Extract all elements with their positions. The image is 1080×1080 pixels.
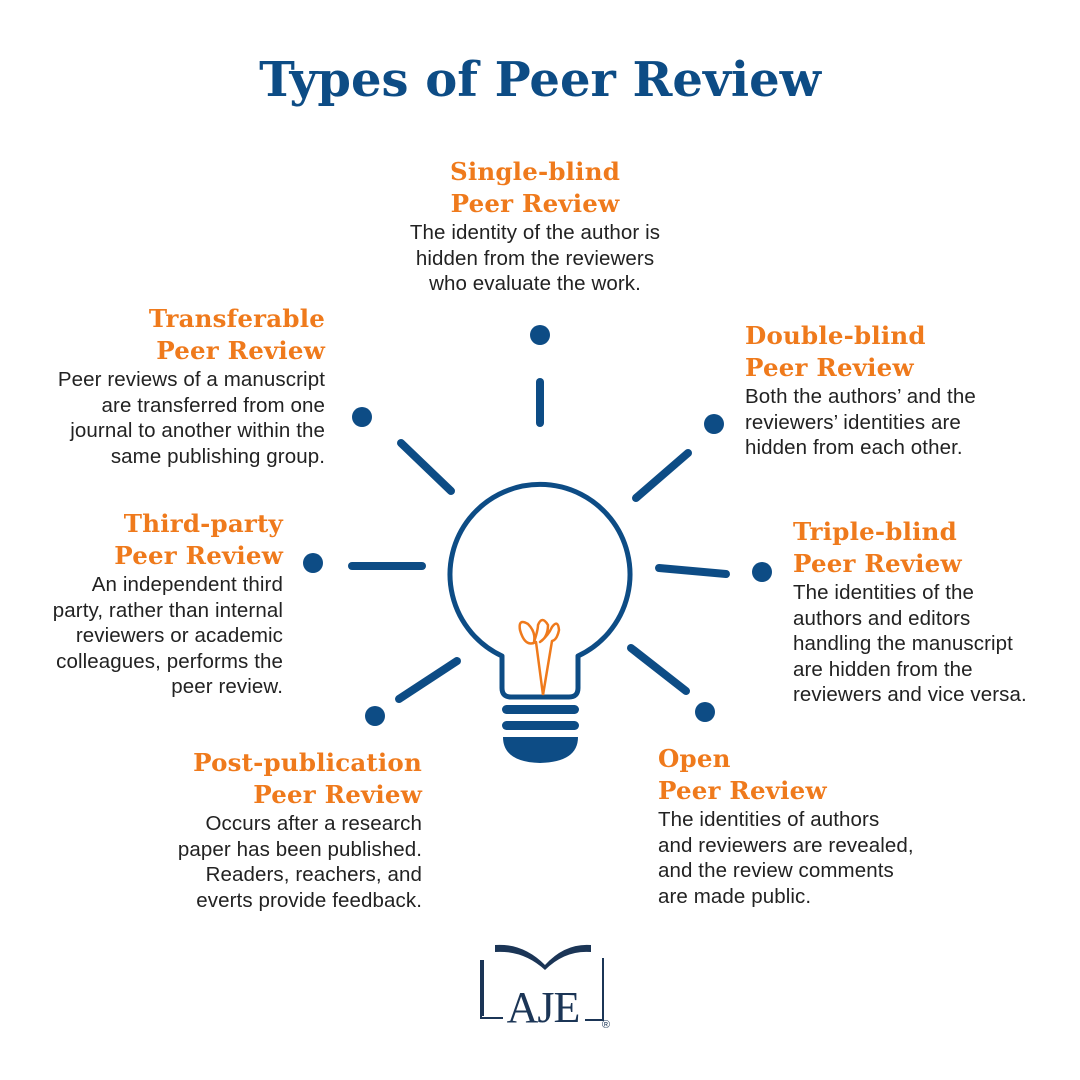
text: double-blind: hidden from each other. [745,436,963,459]
text: transferable: same publishing group. [111,444,325,468]
text: transferable: Transferable [149,304,325,333]
text: post-publication: Occurs after a research [206,812,422,835]
filament [520,620,559,695]
text: post-publication [178,748,422,912]
text: third-party: peer review. [171,675,283,698]
text: double-blind: reviewers’ identities are [745,410,961,434]
text: third-party: Peer Review [114,541,283,570]
text: third-party: An independent third [92,573,283,596]
text: double-blind [745,321,976,459]
text: single-blind: Peer Review [451,189,619,218]
text: transferable: are transferred from one [102,394,325,416]
text: triple-blind: Peer Review [793,549,962,578]
text: single-blind: hidden from the reviewers [416,246,654,270]
text: open: The identities of authors [658,808,879,831]
text: transferable: Peer Review [156,336,325,365]
text: triple-blind: reviewers and vice versa. [793,683,1027,706]
title: Types of Peer Review [259,52,821,108]
text: triple-blind: are hidden from the [793,658,973,680]
logo: AJE: AJE [507,983,579,1032]
text: open: Peer Review [658,776,827,805]
text: double-blind: Peer Review [745,353,914,382]
text: open: are made public. [658,884,811,908]
text: triple-blind: handling the manuscript [793,632,1013,655]
text: triple-blind: authors and editors [793,606,970,630]
text: double-blind: Double-blind [745,321,926,350]
text: third-party: party, rather than internal [53,598,283,622]
text: double-blind: Both the authors’ and the [745,385,976,408]
logo: AJE [480,944,610,1032]
text: open: and reviewers are revealed, [658,834,914,856]
bulb outline [450,484,630,697]
text: post-publication: paper has been published. [178,838,422,860]
text: transferable: journal to another within the [70,419,325,442]
logo: AJE: ® [602,1019,610,1031]
text: third-party: reviewers or academic [76,624,283,647]
text: single-blind: The identity of the author is [410,221,660,244]
text: post-publication: Post-publication [193,748,422,777]
text: open: Open [658,744,731,773]
text: transferable [58,304,326,468]
text: third-party: colleagues, performs the [56,650,283,672]
text: third-party [53,509,284,698]
text: triple-blind [793,517,1027,706]
text: single-blind [410,157,660,295]
text: post-publication: Readers, reachers, and [206,863,422,886]
text: post-publication: Peer Review [253,780,422,809]
text: transferable: Peer reviews of a manuscript [58,368,325,391]
text: single-blind: who evaluate the work. [429,272,641,295]
text: open [658,744,914,908]
text: triple-blind: Triple-blind [793,517,957,546]
text: single-blind: Single-blind [450,157,620,186]
text: third-party: Third-party [124,509,283,538]
text: triple-blind: The identities of the [793,581,974,604]
text: open: and the review comments [658,859,894,882]
text: post-publication: everts provide feedback. [196,888,422,912]
